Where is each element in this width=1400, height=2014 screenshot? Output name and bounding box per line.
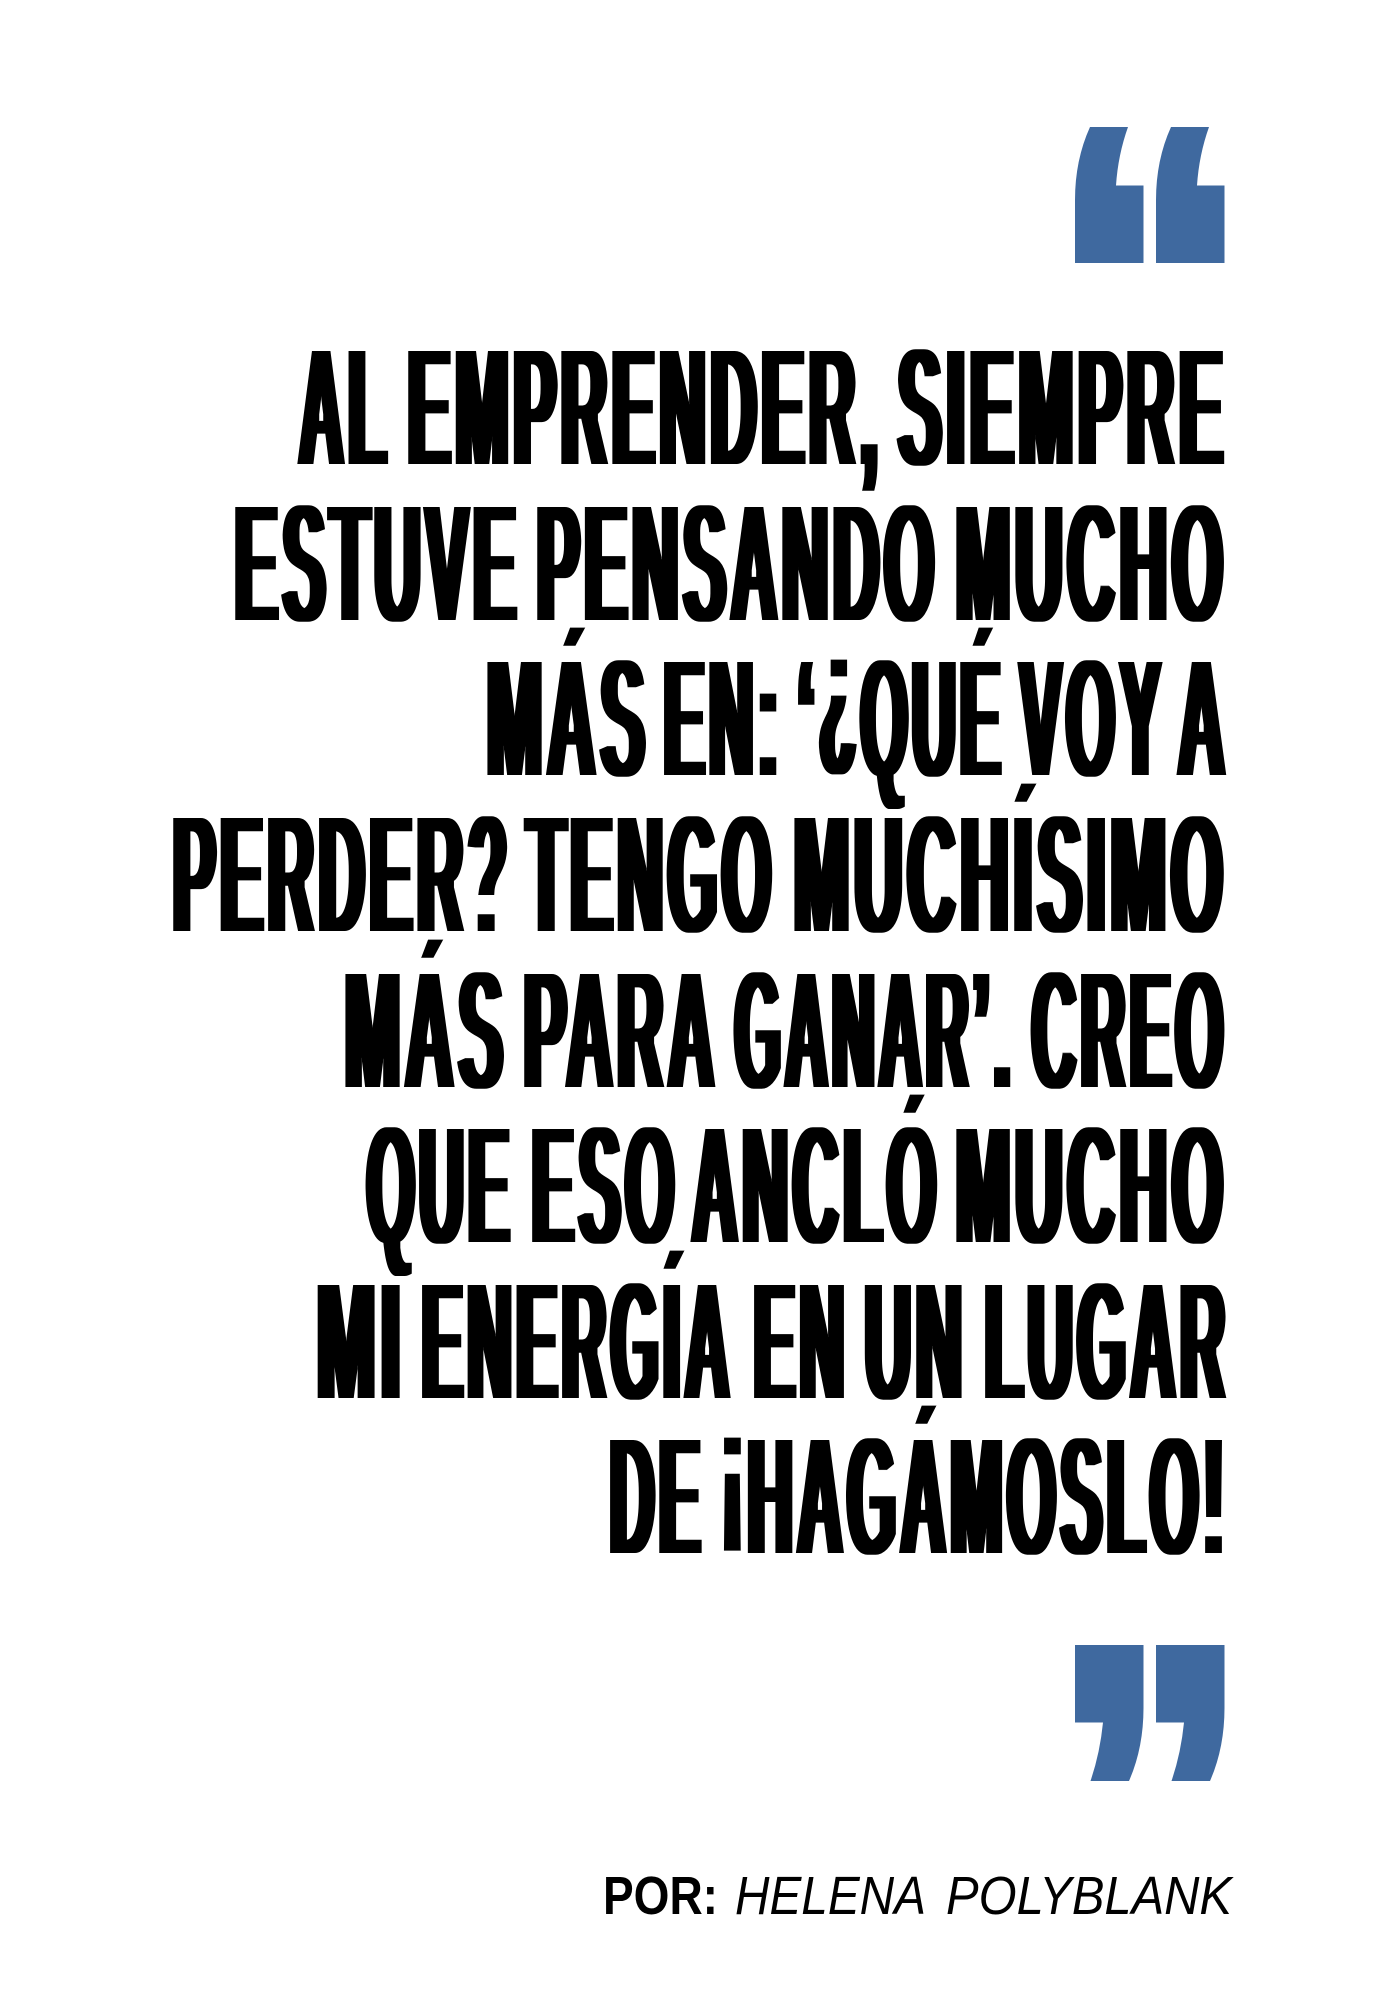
quote line 7: EN bbox=[754, 1244, 849, 1438]
quote line 3: ‘ bbox=[798, 621, 860, 815]
icon: closing quotation mark bbox=[1075, 1645, 1224, 1781]
quote line 6: ANCLÓ bbox=[692, 1088, 941, 1282]
quote line 3: ¿ bbox=[819, 591, 861, 785]
quote text bbox=[173, 310, 1230, 1593]
quote line 4: PERDER? bbox=[173, 777, 512, 971]
quote line 8 bbox=[610, 1369, 1229, 1593]
quote line 4: TENGO bbox=[527, 777, 776, 971]
quote line 8: ¡ bbox=[722, 1369, 748, 1563]
quote line 8: DE bbox=[610, 1399, 705, 1593]
quote line 2: ESTUVE bbox=[235, 466, 521, 660]
quote line 5: MÁS bbox=[345, 933, 508, 1127]
quote line 3 bbox=[487, 591, 1230, 815]
icon: opening quotation mark bbox=[1075, 127, 1224, 263]
quote line 5 bbox=[345, 933, 1228, 1127]
quote infographic: A bbox=[1178, 621, 1230, 815]
byline: POR: bbox=[603, 1866, 718, 1926]
quote line 5: PARA bbox=[524, 933, 719, 1127]
quote line 6: QUE bbox=[367, 1088, 514, 1282]
byline: HELENA bbox=[735, 1866, 926, 1926]
quote line 6: ESO bbox=[532, 1088, 679, 1282]
quote line 3: MÁS bbox=[487, 621, 650, 815]
quote line 3: EN: bbox=[664, 621, 783, 815]
quote line 7: UN bbox=[865, 1244, 967, 1438]
quote line 6 bbox=[367, 1088, 1228, 1282]
quote line 1: AL bbox=[299, 310, 391, 504]
quote line 7: ENERGÍA bbox=[422, 1244, 734, 1438]
quote line 7: MI bbox=[317, 1244, 406, 1438]
quote line 3: QUÉ bbox=[861, 621, 1005, 815]
byline bbox=[603, 1866, 1234, 1926]
byline: POLYBLANK bbox=[946, 1866, 1234, 1926]
